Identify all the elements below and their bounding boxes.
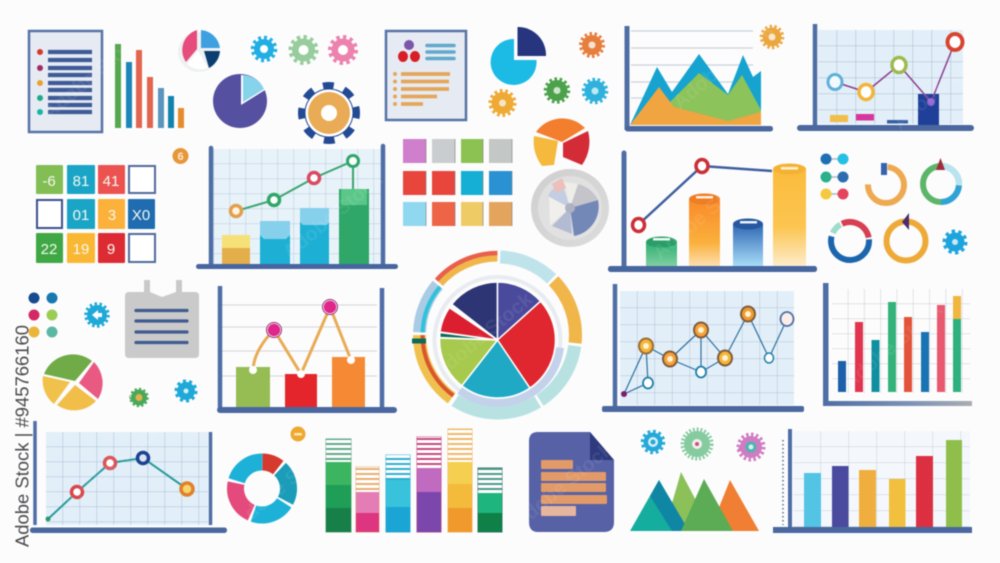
row 3 tiles (36, 233, 155, 263)
stack 4 (417, 437, 441, 532)
row 3 tiles: 19 (73, 241, 89, 258)
icon: dark green gear (546, 80, 568, 102)
donut: navy blue and red (825, 216, 875, 266)
small bars (830, 94, 939, 125)
pie chart: gauge wedges (534, 118, 589, 166)
icon: blue gear with arrow (86, 304, 108, 326)
icon group: connected dot pairs (820, 154, 848, 200)
row 2 tiles: 3 (108, 207, 116, 224)
faint watermark text: Adobe Stock (59, 418, 168, 514)
bars (222, 189, 369, 264)
icon: pink spiky gear (739, 435, 763, 459)
markers (621, 306, 794, 397)
icon: small orange number badge: 6 (177, 151, 184, 163)
outer ring segments (382, 219, 613, 451)
row 3 tiles: 22 (41, 241, 57, 258)
icon: pink gear (331, 38, 355, 62)
line series (828, 34, 962, 106)
list rows (393, 72, 450, 106)
icon: orange gear near area chart (762, 27, 782, 47)
axes (211, 146, 383, 265)
icon: blue gear (176, 382, 196, 400)
text lines (48, 52, 92, 112)
panel: small document with people icon (386, 31, 466, 120)
pie slices (440, 282, 555, 398)
mountain triangles chart (630, 472, 759, 531)
panel: bars with peak line chart (217, 286, 397, 413)
faint watermark text: Adobe Stock (839, 298, 948, 394)
icon: orange gear (582, 34, 602, 56)
blue cylinder (733, 218, 763, 266)
row 2 tiles (37, 199, 155, 229)
trend line (230, 156, 358, 216)
icon: green gear (292, 38, 316, 62)
icon: small orange number badge (172, 148, 188, 164)
stack 5 (448, 429, 472, 532)
donut: orange with purple pointer (886, 213, 926, 260)
icon: gray clipboard (125, 280, 199, 358)
icon: blue gear (254, 38, 274, 60)
row 1 tiles: 81 (73, 173, 89, 190)
row 1 tiles (36, 165, 155, 194)
bars (804, 440, 962, 527)
orange area (630, 87, 761, 125)
icon: large orange and navy gear (298, 82, 360, 144)
pie chart: cyan pie with navy wedge (491, 27, 546, 85)
color swatch grid (403, 139, 512, 226)
faint watermark text: Adobe Stock (229, 438, 338, 534)
row 3 tiles: 9 (107, 241, 115, 258)
faint watermark text: Adobe Stock (889, 38, 998, 134)
panel: line chart with ring markers (797, 24, 974, 131)
bars (838, 296, 961, 392)
orange cylinder (689, 194, 720, 266)
pie chart: four slices (43, 354, 103, 410)
panel: network line chart (602, 284, 804, 412)
inner ring (434, 277, 560, 403)
faint watermark text: Adobe Stock (429, 288, 538, 384)
green cylinder (646, 236, 677, 266)
faint watermark text: Adobe Stock (649, 168, 758, 264)
gray disc with radial segments (531, 169, 609, 247)
yellow cylinder (773, 164, 806, 266)
donut: green blue and pale (921, 158, 961, 204)
row 2 tiles: X0 (132, 207, 150, 224)
donut: orange with blue tab (866, 163, 906, 205)
faint watermark text: Adobe Stock (669, 18, 778, 114)
stacked bar chart (326, 429, 502, 532)
stack 2 (356, 467, 379, 532)
number tile grid (36, 165, 155, 263)
panel: line and bar combo chart (196, 146, 398, 269)
legend dots (28, 292, 58, 338)
stack 6 (478, 468, 502, 532)
panel: center pie chart with outer rings (382, 219, 613, 451)
bullet dots (37, 49, 43, 115)
pie chart: purple pie (213, 74, 267, 128)
row 1 tiles: -6 (42, 173, 56, 190)
bars (236, 357, 365, 407)
panel: bottom left line chart (30, 421, 227, 533)
panel: tall multi-color bar chart (823, 283, 972, 406)
faint watermark text: Adobe Stock (279, 168, 388, 264)
icon: small green and yellow gear (131, 390, 147, 406)
axes (624, 26, 630, 130)
panel: document with bullet list (29, 31, 102, 132)
panel: bottom right bar chart (773, 429, 972, 533)
faint watermark text: Adobe Stock (509, 438, 618, 534)
people icon (398, 40, 420, 62)
row 2 tiles: 01 (73, 207, 89, 224)
document lines (541, 460, 607, 516)
icon: small orange coin (290, 426, 306, 442)
row 1 tiles: 41 (103, 173, 119, 190)
trend line (632, 160, 772, 232)
connecting lines (624, 314, 787, 394)
icon: purple document with orange lines (529, 432, 614, 532)
icon: blue gear near donuts (945, 232, 965, 252)
vertical stock label: Adobe Stock | #945766160 (12, 325, 32, 547)
ring tick (412, 338, 426, 344)
donut chart: bottom (225, 451, 299, 526)
icon: blue ring gear (643, 432, 663, 452)
pie chart: small split pie (178, 30, 220, 72)
icon: yellow gear (491, 92, 514, 114)
line series (46, 452, 193, 522)
stack 1 (326, 439, 351, 532)
panel: area chart (625, 26, 773, 132)
bar chart: descending bars (115, 44, 184, 128)
peak line (249, 300, 355, 378)
green area (670, 73, 761, 125)
faint watermark text: Adobe Stock (39, 28, 148, 124)
blue area (630, 54, 761, 125)
panel: cylinder bar chart (608, 153, 817, 272)
icon: green spiky gear (683, 430, 711, 458)
icon: sky blue gear (584, 80, 606, 102)
stack 3 (386, 455, 410, 532)
